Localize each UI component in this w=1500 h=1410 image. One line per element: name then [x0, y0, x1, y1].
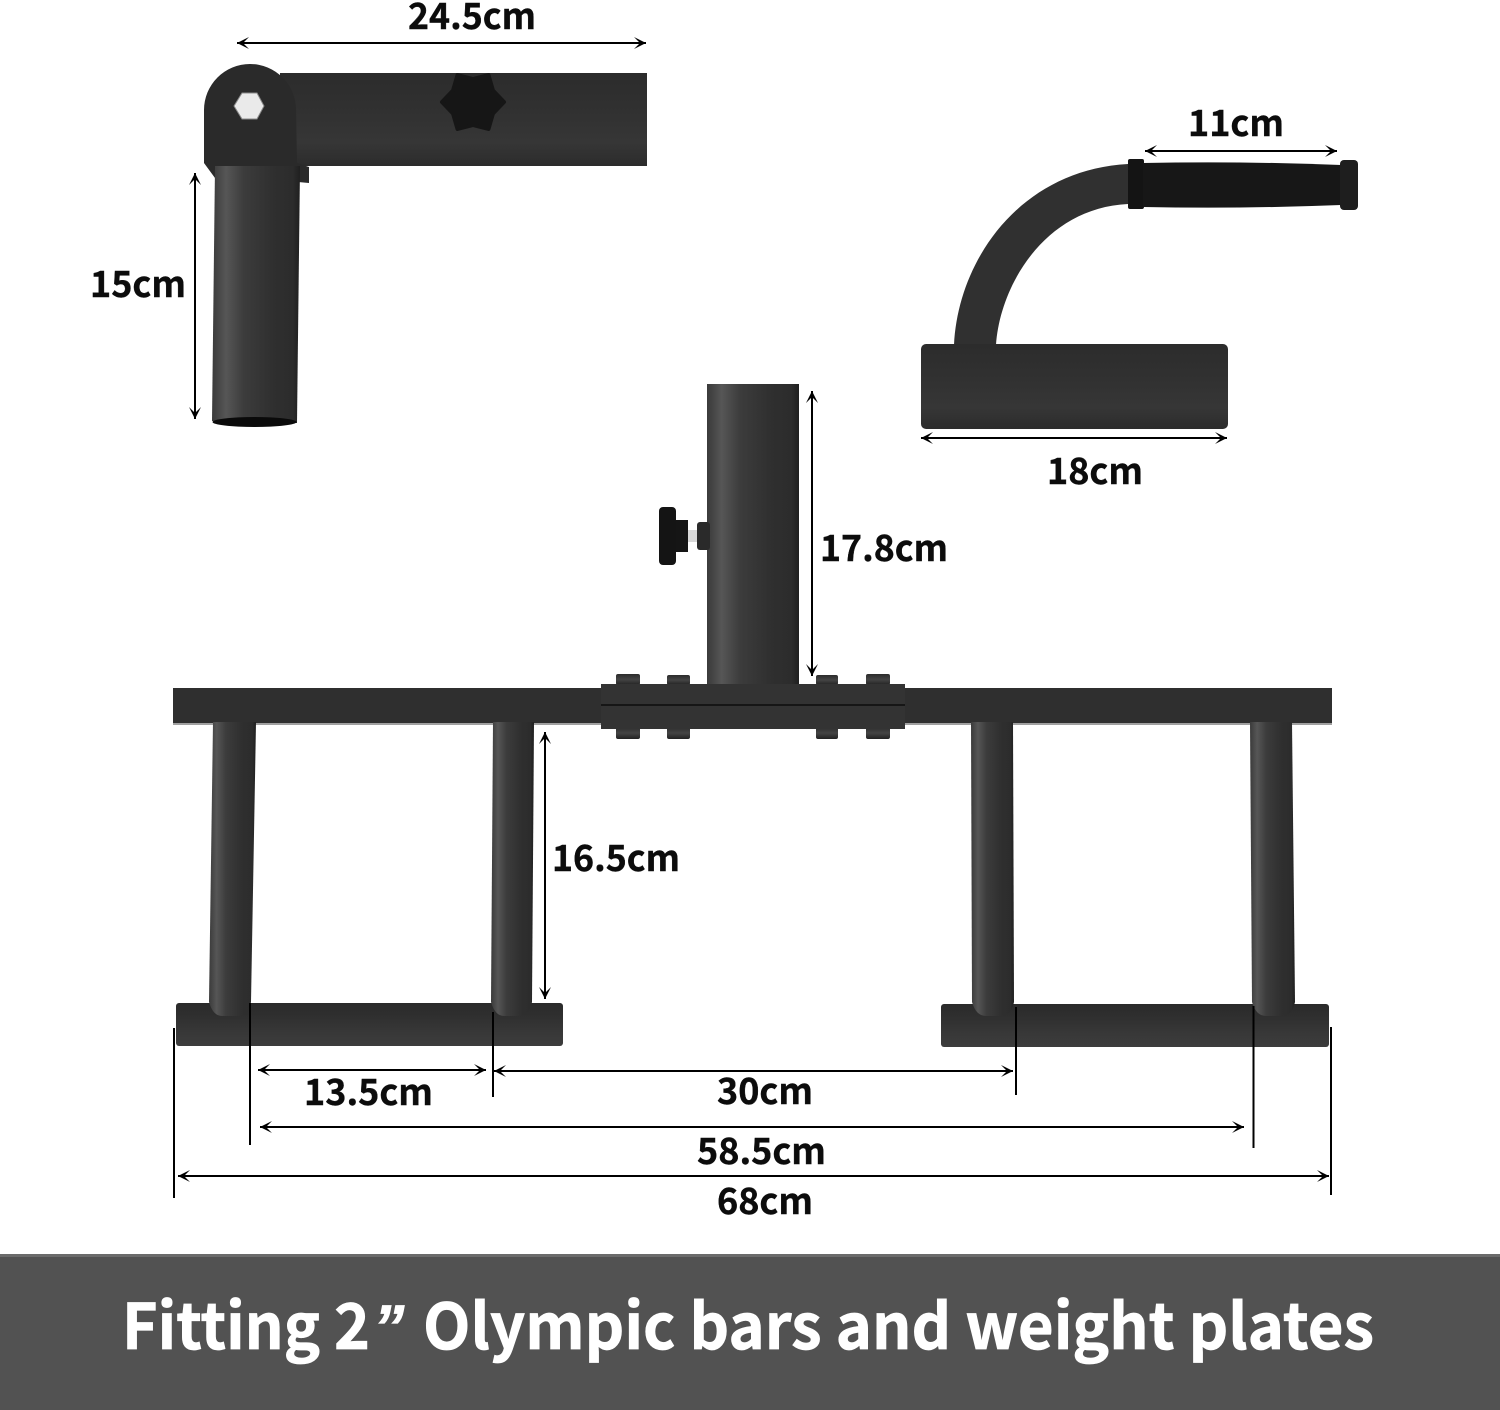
dimension labels: 68cm: [717, 1173, 813, 1225]
dimension labels: 17.8cm: [820, 520, 948, 572]
dimension labels: 16.5cm: [552, 830, 680, 882]
footer banner: Fitting 2: [122, 1277, 370, 1368]
dimension labels: 13.5cm: [304, 1064, 433, 1116]
dimension labels: 58.5cm: [697, 1123, 826, 1175]
dimension lines: [174, 43, 1337, 1198]
main crossbar: [173, 688, 1332, 725]
dimension labels: 15cm: [90, 256, 186, 308]
bolts: [616, 674, 890, 739]
uprights: [209, 722, 1295, 1016]
footer banner: [0, 1254, 1500, 1410]
clamp plate: [601, 684, 905, 729]
dimension labels: 18cm: [1047, 443, 1143, 495]
footer banner: ”: [373, 1293, 405, 1363]
product: L-shaped sleeve attachment: [204, 64, 647, 427]
footer banner: Olympic bars and weight plates: [423, 1277, 1374, 1368]
dimension labels: 30cm: [717, 1063, 813, 1115]
product: curved handle attachment: [921, 159, 1358, 429]
bottom plate sleeves: [176, 1003, 1329, 1047]
vertical sleeve with knob: [659, 384, 799, 685]
dimension labels: 11cm: [1188, 95, 1284, 147]
product: row handle frame: [173, 384, 1332, 1047]
dimension labels: [90, 0, 1284, 1225]
